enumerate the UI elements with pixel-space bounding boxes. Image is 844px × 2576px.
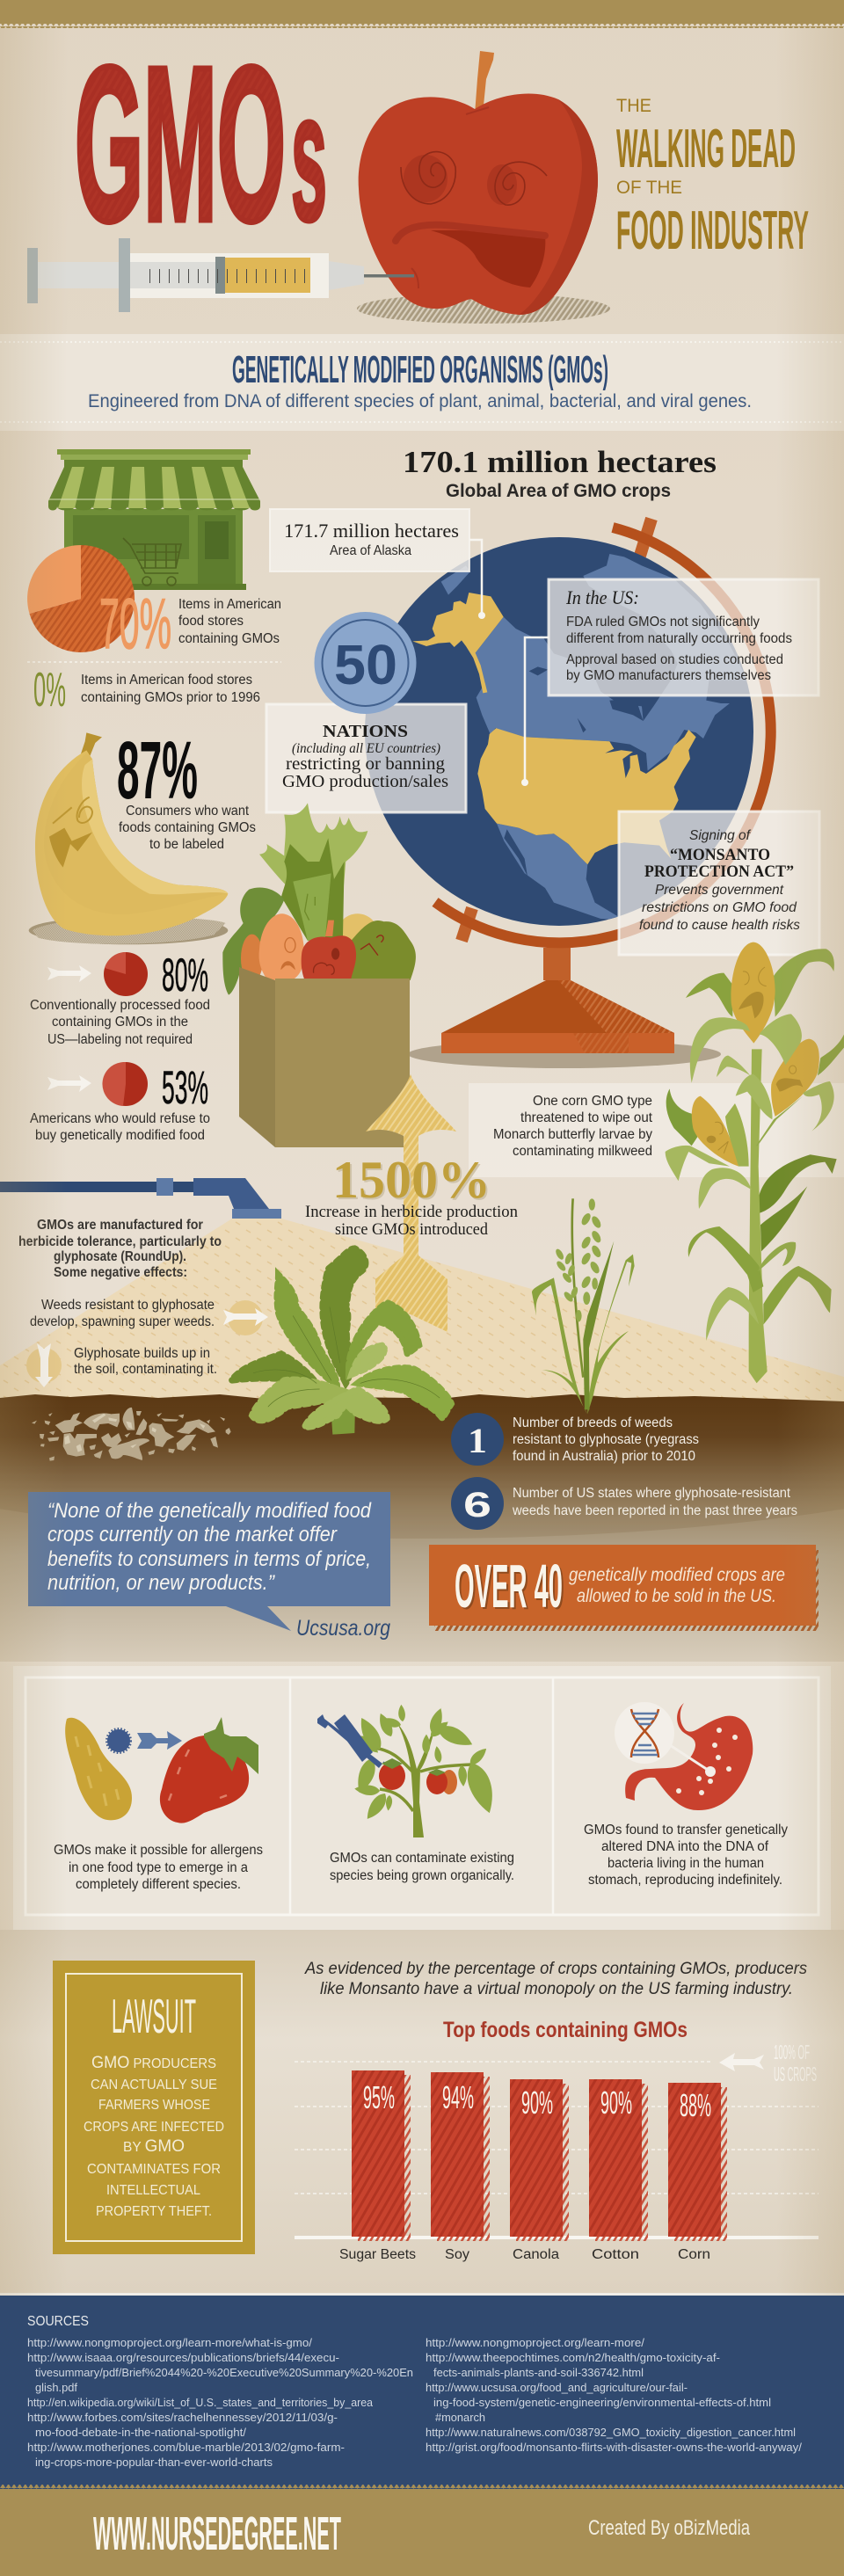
- lawsuit text: FARMERS WHOSE: [98, 2098, 210, 2113]
- footer credit: Created By oBizMedia: [588, 2516, 751, 2540]
- bar: sugar beets 95%: Sugar Beets: [339, 2247, 416, 2262]
- sources left column: glish.pdf: [35, 2381, 77, 2394]
- stat: 87%: [117, 724, 256, 852]
- stat text: 70%: Items in American: [178, 597, 281, 612]
- pipe and nozzle: [0, 1178, 281, 1219]
- text: organic contamination: [330, 1851, 514, 1883]
- footer: [0, 2485, 844, 2576]
- callout: Monsanto Protection Act: Signing of: [689, 828, 752, 843]
- icon: zombie apple: [357, 51, 610, 324]
- callout: over 40 crops: OVER 40: [455, 1552, 563, 1620]
- stat: 6 states: [451, 1477, 797, 1530]
- stat: 1500%: 1500%: [332, 1151, 491, 1209]
- headline: global area: [403, 445, 717, 501]
- stat: 1 breed: 1: [468, 1421, 487, 1460]
- effect: soil contamination: [26, 1343, 217, 1387]
- stat: 1500%: [305, 1151, 518, 1239]
- text: herbicide tolerance: [18, 1218, 222, 1280]
- sources right column: http://www.naturalnews.com/038792_GMO_toxicity_digestion_cancer.html: [426, 2426, 796, 2439]
- callout: in the US: different from naturally occurring foods: [566, 631, 792, 646]
- callout: Monsanto Protection Act: PROTECTION ACT”: [644, 862, 794, 881]
- callout: Alaska: Area of Alaska: [330, 543, 411, 558]
- sources left column: tivesummary/pdf/Brief%2044%20-%20Executive%20Summary%20-%20En: [35, 2366, 413, 2379]
- land: Alaska: [412, 593, 504, 693]
- bar: soy 94%: Soy: [445, 2247, 469, 2262]
- effect: super weeds: [30, 1298, 268, 1335]
- callout: nations: GMO production/sales: [282, 772, 448, 791]
- chart title: Top foods containing GMOs: [443, 2018, 688, 2042]
- effect: super weeds: Weeds resistant to glyphosate: [41, 1298, 215, 1313]
- stat: 80%: [30, 950, 210, 1047]
- stat: 1 breed: [451, 1413, 699, 1466]
- text: DNA transfer: [584, 1823, 788, 1888]
- lawsuit text: PROPERTY THEFT.: [96, 2204, 212, 2219]
- stat: 6 states: weeds have been reported in the past three years: [512, 1503, 797, 1518]
- sources left column: http://www.isaaa.org/resources/publications/briefs/44/execu-: [27, 2351, 339, 2364]
- badge: 50: 50: [334, 633, 397, 696]
- callout: in the US: Approval based on studies conducted: [566, 652, 783, 667]
- quote callout: benefits to consumers in terms of price,: [47, 1547, 371, 1571]
- callout: in the US: by GMO manufacturers themselves: [566, 668, 771, 683]
- text: herbicide tolerance: herbicide tolerance, particularly to: [18, 1234, 222, 1249]
- subtitle: the walking dead of the food industry: [616, 96, 809, 261]
- panel: risks: [13, 1666, 831, 1930]
- effect: soil contamination: Glyphosate builds up in: [74, 1346, 210, 1361]
- icon: shopping cart: [123, 538, 181, 586]
- sources left column: ing-crops-more-popular-than-ever-world-charts: [35, 2456, 273, 2469]
- stat: 1 breed: found in Australia) prior to 2010: [513, 1449, 695, 1464]
- land: Canada: [476, 617, 730, 771]
- sources left column: http://www.motherjones.com/blue-marble/2013/02/gmo-farm-: [27, 2441, 345, 2454]
- stat: 1 breed: resistant to glyphosate (ryegrass: [513, 1432, 699, 1447]
- sources right column: http://www.nongmoproject.org/learn-more/: [426, 2336, 644, 2349]
- bar: soy 94%: [431, 2072, 490, 2262]
- text: herbicide tolerance: GMOs are manufactured for: [37, 1218, 203, 1233]
- bar: canola 90%: 90%: [521, 2085, 553, 2121]
- land: Mexico: [497, 824, 624, 921]
- stat text: 70%: containing GMOs: [178, 631, 280, 646]
- sources left column: http://www.forbes.com/sites/rachelhennessey/2012/11/03/g-: [27, 2411, 338, 2424]
- effect: soil contamination: the soil, contaminating it.: [74, 1362, 217, 1377]
- callout: monarch butterfly: threatened to wipe out: [520, 1110, 653, 1125]
- quote callout: “None of the genetically modified food: [47, 1499, 372, 1523]
- stat: 0%: 0%: [33, 662, 66, 717]
- stat: 6 states: Number of US states where glyphosate-resistant: [513, 1486, 791, 1501]
- quote callout: nutrition, or new products.”: [47, 1571, 275, 1595]
- callout: Monsanto Protection Act: Prevents government: [655, 883, 784, 898]
- lawsuit text: GMO PRODUCERS: [91, 2054, 216, 2072]
- quote callout: [28, 1492, 390, 1641]
- text: organic contamination: species being grown organically.: [330, 1868, 514, 1883]
- stat text: 70%: [178, 597, 281, 646]
- bar chart: top foods containing GMOs: [295, 2018, 819, 2262]
- icon: zombie banana: [29, 732, 228, 944]
- sources right column: fects-animals-plants-and-soil-336742.html: [433, 2366, 644, 2379]
- sources heading: SOURCES: [27, 2314, 89, 2329]
- sources left column: [27, 2336, 413, 2469]
- lawsuit text: [84, 2054, 224, 2219]
- callout: Monsanto Protection Act: “MONSANTO: [670, 846, 770, 864]
- headline: global area: 170.1 million hectares: [403, 445, 717, 479]
- stat: 53%: 53%: [162, 1062, 208, 1114]
- stat: 80%: 80%: [162, 950, 208, 1001]
- callout: Alaska: 171.7 million hectares: [284, 520, 459, 542]
- spray of herbicide: [0, 1219, 844, 1407]
- icon: grocery store: [48, 449, 260, 590]
- icon: globe with stand: [365, 519, 771, 1068]
- bar: corn 88%: Corn: [678, 2247, 710, 2262]
- callout: monarch butterfly: One corn GMO type: [533, 1094, 652, 1109]
- text: allergens: [54, 1843, 263, 1892]
- stat text: 70%: food stores: [178, 614, 244, 629]
- 100% marker: [719, 2041, 817, 2085]
- bar: canola 90%: Canola: [513, 2247, 559, 2262]
- text: monopoly statement: [304, 1960, 807, 1998]
- callout: monarch butterfly: [469, 1083, 844, 1177]
- callout: over 40 crops: genetically modified crops are: [569, 1565, 785, 1585]
- callout: Monsanto Protection Act: restrictions on GMO food: [642, 900, 797, 915]
- sources right column: ing-food-system/genetic-engineering/environmental-effects-of.html: [433, 2396, 771, 2409]
- icon: tomato plant with syringe: [317, 1705, 500, 1837]
- sources left column: http://en.wikipedia.org/wiki/List_of_U.S._states_and_territories_by_area: [27, 2396, 374, 2409]
- effect: super weeds: develop, spawning super weeds.: [30, 1314, 215, 1329]
- sources right column: http://www.theepochtimes.com/n2/health/gmo-toxicity-af-: [426, 2351, 720, 2364]
- stat: 53%: Americans who would refuse to: [30, 1111, 210, 1126]
- bar: sugar beets 95%: 95%: [363, 2079, 395, 2115]
- stat: 87%: Consumers who want: [126, 804, 250, 819]
- text: allergens: GMOs make it possible for allergens: [54, 1843, 263, 1858]
- arrow: herbicide increase: [366, 1074, 456, 1332]
- sources right column: http://www.ucsusa.org/food_and_agriculture/our-fail-: [426, 2381, 688, 2394]
- pie chart: 70%: [27, 545, 171, 664]
- callout: in the US: [521, 579, 819, 786]
- text: DNA transfer: bacteria living in the human: [608, 1856, 764, 1871]
- subtitle: the walking dead of the food industry: THE: [616, 96, 651, 116]
- icon: glyphosate rocks in soil: [32, 1408, 231, 1461]
- bar: cotton 90%: [589, 2079, 648, 2262]
- top band: [0, 0, 844, 28]
- icon: stomach and DNA: [615, 1702, 753, 1810]
- footer: WWW.NURSEDEGREE.NET: [93, 2507, 341, 2560]
- panel: sources: [0, 2293, 844, 2489]
- subtitle: the walking dead of the food industry: OF THE: [616, 178, 682, 198]
- text: herbicide tolerance: glyphosate (RoundUp).: [54, 1249, 186, 1264]
- icon: grocery bag with zombie vegetables: [222, 803, 416, 1147]
- text: DNA transfer: altered DNA into the DNA of: [601, 1839, 769, 1854]
- lawsuit text: CROPS ARE INFECTED: [84, 2120, 224, 2135]
- text: monopoly statement: As evidenced by the percentage of crops containing GMOs, producers: [304, 1960, 807, 1978]
- stat: 6 states: 6: [463, 1486, 491, 1524]
- icon: zombie corn: [666, 942, 844, 1383]
- text: DNA transfer: stomach, reproducing indefinitely.: [588, 1873, 782, 1888]
- stat: 1500%: since GMOs introduced: [335, 1220, 488, 1239]
- headline: global area: Global Area of GMO crops: [446, 481, 671, 501]
- stat: 1 breed: Number of breeds of weeds: [513, 1415, 673, 1430]
- sources left column: mo-food-debate-in-the-national-spotlight/: [35, 2426, 246, 2439]
- lawsuit text: BY GMO: [123, 2137, 185, 2156]
- stat: 87%: 87%: [117, 724, 198, 816]
- icon: peanut to strawberry: [65, 1717, 258, 1823]
- bar: corn 88%: [668, 2083, 727, 2262]
- bar: soy 94%: 94%: [442, 2079, 474, 2115]
- lawsuit text: INTELLECTUAL: [106, 2183, 200, 2198]
- bar: cotton 90%: Cotton: [592, 2247, 639, 2262]
- quote callout: crops currently on the market offer: [47, 1523, 338, 1546]
- stat: 0%: Items in American food stores: [81, 673, 252, 688]
- panel: lawsuit: [53, 1961, 255, 2254]
- text: s: [291, 55, 327, 259]
- icon: syringe: [27, 238, 414, 312]
- stat: 87%: foods containing GMOs: [119, 820, 256, 835]
- sources right column: http://grist.org/food/monsanto-flirts-with-disaster-owns-the-world-anyway/: [426, 2441, 802, 2454]
- stat: 80%: containing GMOs in the: [52, 1015, 188, 1030]
- text: GMO: [75, 21, 286, 266]
- text: allergens: in one food type to emerge in a: [69, 1860, 248, 1875]
- band: definition: [0, 334, 844, 431]
- stat: 80%: Conventionally processed food: [30, 998, 210, 1013]
- badge: 50: [315, 612, 417, 714]
- stat: 0%: containing GMOs prior to 1996: [81, 690, 260, 705]
- text: DNA transfer: GMOs found to transfer genetically: [584, 1823, 788, 1837]
- bar: sugar beets 95%: [339, 2070, 416, 2262]
- stat: 80%: US—labeling not required: [47, 1032, 193, 1047]
- callout: nations: (including all EU countries): [292, 741, 440, 756]
- stat: 1500%: 1500%: [334, 1153, 492, 1211]
- text: organic contamination: GMOs can contaminate existing: [330, 1851, 514, 1866]
- sources left column: http://www.nongmoproject.org/learn-more/what-is-gmo/: [27, 2336, 312, 2349]
- callout: over 40 crops: OVER 40: [456, 1554, 564, 1622]
- stat: 1500%: Increase in herbicide production: [305, 1203, 518, 1221]
- callout: monarch butterfly: Monarch butterfly larvae by: [493, 1127, 652, 1142]
- stat: 53%: [30, 1062, 210, 1143]
- bar: canola 90%: [510, 2079, 569, 2262]
- text: allergens: completely different species.: [76, 1877, 241, 1892]
- sources right column: #monarch: [435, 2411, 485, 2424]
- definition text: Engineered from DNA of different species of plant, animal, bacterial, and viral genes.: [88, 391, 752, 411]
- land: United States: [477, 728, 696, 864]
- callout: nations: NATIONS: [323, 722, 408, 741]
- icon: super weed: [231, 1248, 451, 1435]
- lawsuit text: CONTAMINATES FOR: [87, 2162, 221, 2177]
- callout: Alaska: [270, 509, 485, 619]
- stat: 53%: buy genetically modified food: [35, 1128, 205, 1143]
- callout: in the US: FDA ruled GMOs not significantly: [566, 615, 760, 629]
- bar: cotton 90%: 90%: [600, 2085, 632, 2121]
- quote callout: Ucsusa.org: [296, 1616, 390, 1641]
- callout: over 40 crops: [429, 1545, 819, 1631]
- callout: Monsanto Protection Act: [619, 811, 819, 955]
- callout: Monsanto Protection Act: found to cause health risks: [639, 918, 800, 933]
- text: herbicide tolerance: Some negative effects:: [54, 1265, 187, 1280]
- callout: monarch butterfly: contaminating milkweed: [513, 1144, 652, 1159]
- bar: corn 88%: 88%: [680, 2087, 711, 2123]
- stat: 87%: to be labeled: [149, 837, 224, 852]
- text: monopoly statement: like Monsanto have a virtual monopoly on the US farming industry.: [320, 1980, 793, 1998]
- icon: ryegrass: [532, 1198, 635, 1414]
- soil: [0, 1394, 844, 1662]
- sources right column: [426, 2336, 802, 2454]
- title: GMOs: [75, 21, 327, 266]
- callout: in the US: In the US:: [565, 586, 639, 608]
- panel: lawsuit: LAWSUIT: [112, 1989, 196, 2043]
- callout: nations: restricting or banning: [286, 754, 445, 774]
- stat: 0%: [33, 662, 260, 717]
- callout: nations: [266, 704, 466, 812]
- callout: over 40 crops: allowed to be sold in the US.: [577, 1586, 776, 1606]
- pie chart: 70%: 70%: [99, 585, 171, 664]
- lawsuit text: CAN ACTUALLY SUE: [91, 2078, 217, 2092]
